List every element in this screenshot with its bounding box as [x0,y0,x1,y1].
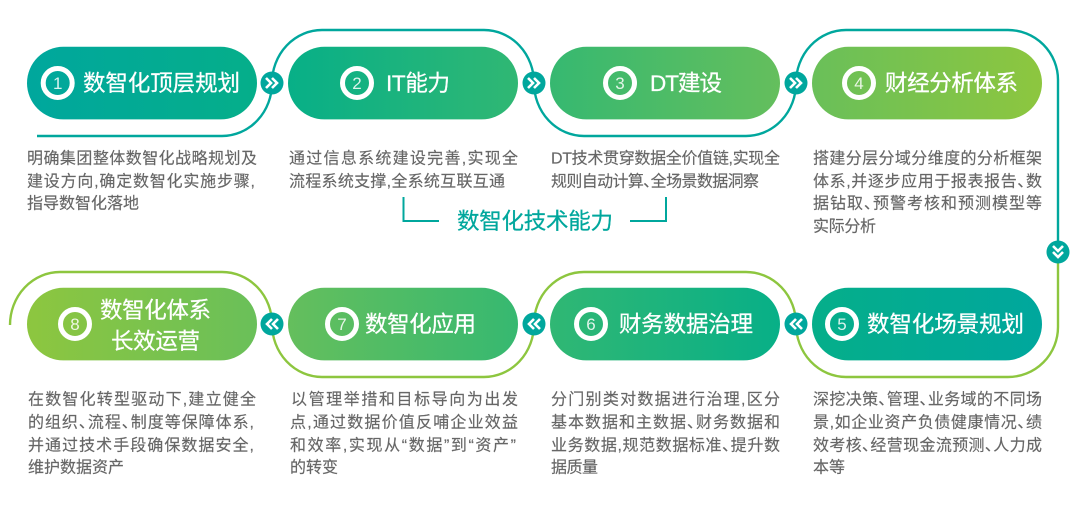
label: digital technology capability: 数智化技术能力 [457,209,613,234]
step 5 description: 本等 [813,458,845,476]
step 7 description: 以管理举措和目标导向为出发 [291,390,518,408]
step 6 description: 分门别类对数据进行治理,区分 [551,390,780,408]
step 3 description: DT技术贯穿数据全价值链,实现全 [551,150,780,168]
step 4 pill: 4 [854,74,864,93]
step 4 description: 搭建分层分域分维度的分析框架 [813,150,1042,168]
step 8 description: 维护数据资产 [28,458,124,476]
step 4 description: 体系,并逐步应用于报表报告、数 [813,172,1042,190]
step 5 description: 景,如企业资产负债健康情况、绩 [813,414,1042,432]
step 5 pill: 5 [837,315,847,334]
step 8 pill [27,288,257,360]
step 3 pill: 3 [615,74,625,93]
arrow icon: step 3 to 4 [784,72,808,94]
step 4 description [813,150,1042,236]
step 8 pill: 8 [70,315,80,334]
step 8 description: 并通过技术手段确保数据安全, [28,436,254,454]
step 1 description: 建设方向,确定数智化实施步骤, [27,172,255,190]
step 1 pill: 数智化顶层规划 [83,71,240,96]
arrow icon: step 1 to 2 [260,72,284,94]
step 7 description: 的转变 [290,458,338,476]
step 3 pill: DT建设 [650,71,722,96]
step 2 pill: 2 [352,74,362,93]
arrow icon: step 6 to 7 [522,312,546,336]
step 8 description: 在数智化转型驱动下,建立健全 [28,390,256,408]
step 2 description: 流程系统支撑,全系统互联互通 [289,172,505,190]
step 6 description: 据质量 [551,458,598,476]
step 8 description: 的组织、流程、制度等保障体系, [28,414,254,432]
step 3 pill [550,47,780,119]
bracket: right [630,197,666,221]
arrow icon: step 7 to 8 [260,312,284,336]
step 5 description [813,390,1042,476]
arrow icon: step 4 down to 5 [1046,240,1070,264]
step 8 pill: 数智化体系 [100,298,211,323]
step 3 description [551,150,780,190]
step 4 description: 据钻取、预警考核和预测模型等 [813,194,1042,212]
step 5 description: 效考核、经营现金流预测、人力成 [813,436,1042,454]
step 6 description: 业务数据,规范数据标准、提升数 [551,436,780,454]
step 7 pill: 数智化应用 [365,312,476,337]
step 4 pill [812,47,1042,119]
step 1 pill: 1 [53,74,62,93]
step 3 description: 规则自动计算、全场景数据洞察 [551,172,759,190]
step 7 pill [288,288,518,360]
step 5 description: 深挖决策、管理、业务域的不同场 [813,390,1042,408]
step 7 description [290,390,518,476]
step 2 pill [288,47,518,119]
step 2 description [289,150,518,190]
step 8 pill: 长效运营 [111,329,200,354]
connector line: top row [37,30,1058,252]
arrow icon: step 2 to 3 [522,72,546,94]
bracket: left [404,197,439,221]
step 1 pill [27,47,257,119]
step 7 description: 点,通过数据价值反哺企业效益 [290,414,518,432]
step 7 pill: 7 [337,315,347,334]
step 8 description [28,390,256,476]
step 4 description: 实际分析 [813,218,876,236]
step 7 description: 和效率,实现从“数据”到“资产” [290,436,516,454]
step 6 pill [550,288,780,360]
step 2 description: 通过信息系统建设完善,实现全 [289,150,518,168]
connector line: bottom row [10,252,1058,377]
step 2 pill: IT能力 [386,71,450,96]
arrow icon: step 5 to 6 [784,312,808,336]
step 1 description: 指导数智化落地 [27,194,139,212]
step 1 description [27,150,257,212]
step 6 description [551,390,780,476]
step 6 description: 基本数据和主数据、财务数据和 [551,414,780,432]
step 6 pill: 财务数据治理 [619,312,753,337]
step 5 pill [812,288,1042,360]
step 6 pill: 6 [586,315,596,334]
step 5 pill: 数智化场景规划 [867,312,1024,337]
step 4 pill: 财经分析体系 [885,71,1018,96]
step 1 description: 明确集团整体数智化战略规划及 [27,150,257,168]
